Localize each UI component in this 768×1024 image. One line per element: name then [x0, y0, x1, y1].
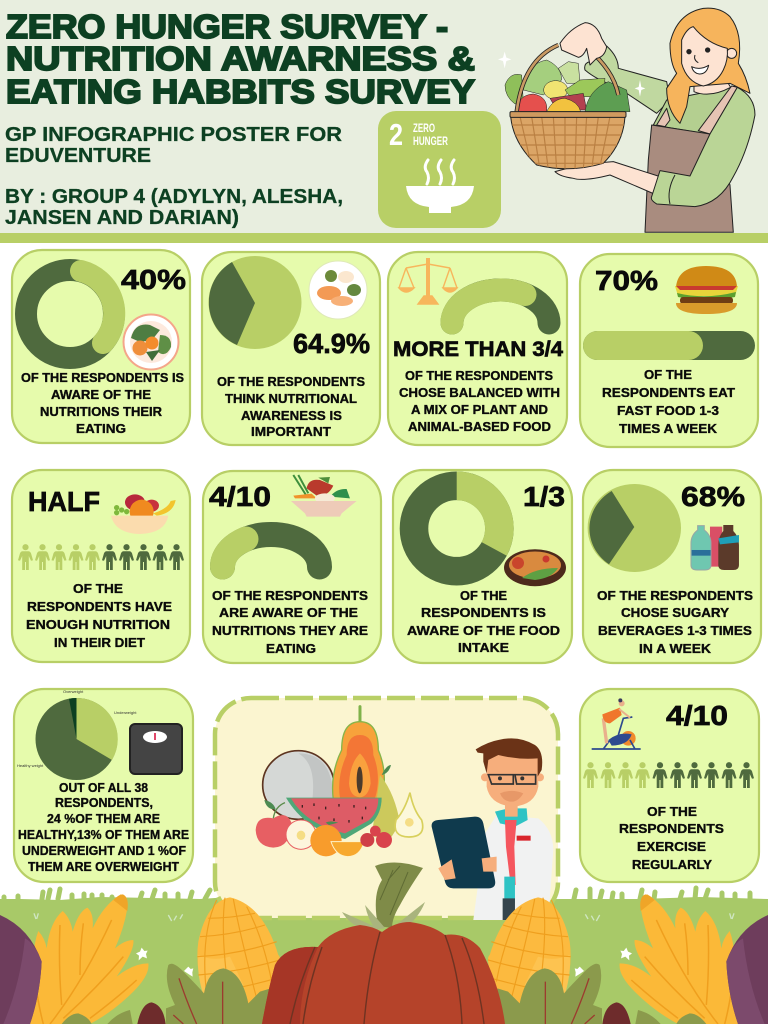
description: ANIMAL-BASED FOOD [408, 419, 551, 434]
icon: shrimp plate [309, 261, 367, 319]
description: EXERCISE [637, 839, 706, 854]
description: UNDERWEIGHT AND 1 %OF [22, 843, 186, 858]
description: CHOSE SUGARY [621, 605, 729, 620]
panel: 70% fast food [580, 254, 758, 447]
panel: weight categories [14, 689, 193, 882]
stat: 68% [681, 481, 745, 512]
description: NUTRITIONS THEIR [40, 404, 163, 419]
stat: 4/10 [666, 700, 728, 731]
panel: 4/10 aware of nutritions [203, 471, 381, 663]
description: OF THE RESPONDENTS [212, 588, 368, 603]
icon: salad plate [124, 314, 178, 370]
description: RESPONDENTS [619, 821, 724, 836]
pie chart 64.9% [208, 256, 302, 349]
description [217, 374, 365, 439]
description: IN THEIR DIET [54, 635, 145, 650]
icon: balance scales [399, 258, 457, 304]
description: OF THE [647, 804, 697, 819]
description: HEALTHY,13% OF THEM ARE [18, 827, 189, 842]
description: RESPONDENTS EAT [602, 385, 735, 400]
description [21, 370, 184, 436]
description [399, 368, 560, 434]
description [602, 367, 735, 436]
pictogram row: four of ten people [583, 762, 754, 788]
description: ARE AWARE OF THE [219, 605, 358, 620]
description: OUT OF ALL 38 [59, 780, 148, 795]
title: EATING HABBITS SURVEY [6, 73, 475, 110]
description: IMPORTANT [251, 424, 331, 439]
description: RESPONDENTS IS [421, 605, 546, 620]
gauge arc [222, 534, 320, 567]
description: TIMES A WEEK [619, 421, 718, 436]
panel: dashed illustration frame [215, 698, 558, 920]
description: OF THE [73, 581, 123, 596]
description: A MIX OF PLANT AND [411, 402, 548, 417]
pie chart: weight: Healthy weight [17, 763, 44, 768]
illustration: green leaf left [34, 913, 271, 1024]
header background [0, 0, 768, 233]
panel: half enough nutrition [12, 470, 190, 662]
description: AWARENESS IS [241, 408, 342, 423]
description: OF THE [644, 367, 692, 382]
description: OF THE RESPONDENTS [597, 588, 753, 603]
icon: soda bottles [691, 525, 739, 570]
description [26, 581, 172, 650]
authors [5, 186, 343, 229]
panel: 40% nutrition awareness [12, 250, 190, 443]
subtitle: EDUVENTURE [5, 145, 151, 167]
description: EATING [76, 421, 126, 436]
grass field [0, 888, 768, 1024]
stat: 64.9% [293, 328, 370, 359]
title: NUTRITION AWARNESS & [6, 40, 475, 77]
panel: 64.9% think awareness important [202, 252, 380, 445]
description: RESPONDENTS HAVE [27, 599, 172, 614]
illustration: green leaf right [497, 913, 734, 1024]
description: FAST FOOD 1-3 [617, 403, 719, 418]
subtitle: GP INFOGRAPHIC POSTER FOR [5, 124, 343, 146]
description [212, 588, 368, 656]
description: ENOUGH NUTRITION [26, 617, 170, 632]
illustration: corn right [488, 897, 571, 1024]
description: CHOSE BALANCED WITH [399, 385, 560, 400]
description: REGULARLY [632, 857, 712, 872]
panel: 4/10 exercise [580, 689, 759, 882]
icon: weighing scale [130, 724, 182, 774]
SDG 2 zero hunger tile: 2 [389, 117, 403, 152]
description: INTAKE [458, 640, 509, 655]
stat: 1/3 [523, 481, 565, 512]
description [407, 588, 560, 655]
description: OF THE RESPONDENTS [217, 374, 365, 389]
title [6, 8, 475, 110]
description: NUTRITIONS THEY ARE [212, 623, 368, 638]
donut chart 40% [26, 270, 114, 358]
pie chart: weight: Overweight [63, 689, 84, 694]
pie chart: weight [17, 689, 137, 780]
icon: fruit bowl [111, 494, 176, 534]
description: RESPONDENTS, [55, 795, 153, 810]
illustration: pumpkin [262, 862, 505, 1024]
panel: 68% sugary beverages [583, 470, 761, 663]
description: EATING [266, 641, 316, 656]
icon: exercise bike [592, 698, 641, 749]
icon: burger [675, 266, 738, 314]
illustration: eggplant right [726, 915, 768, 1024]
illustration: doctor with tablet [432, 738, 553, 920]
authors: BY : GROUP 4 (ADYLYN, ALESHA, [5, 186, 343, 208]
authors: JANSEN AND DARIAN) [5, 207, 239, 229]
icon: food dish [504, 549, 566, 586]
title: ZERO HUNGER SURVEY - [6, 8, 448, 45]
stat: HALF [28, 486, 100, 517]
description [619, 804, 724, 872]
description: THEM ARE OVERWEIGHT [28, 859, 179, 874]
stat: 70% [595, 265, 658, 296]
description: OF THE RESPONDENTS [405, 368, 553, 383]
subtitle [5, 124, 343, 167]
SDG 2 zero hunger tile [378, 111, 501, 228]
donut chart 1/3 [414, 486, 499, 571]
description: OF THE [460, 588, 507, 603]
illustration: woman holding basket [498, 8, 755, 232]
stat: 4/10 [209, 481, 271, 512]
description: 24 %OF THEM ARE [47, 811, 160, 826]
pictogram row: half of ten people [18, 544, 184, 570]
gauge arc [452, 290, 549, 323]
description [597, 588, 753, 656]
progress bar 70% [583, 331, 755, 360]
illustration: yellow leaf left [27, 894, 148, 1024]
illustration: yellow leaf right [620, 894, 741, 1024]
description: OF THE RESPONDENTS IS [21, 370, 184, 385]
illustration: corn left [197, 897, 280, 1024]
pie chart 68% [588, 484, 681, 572]
stat: MORE THAN 3/4 [393, 338, 563, 361]
illustration: fruits [256, 707, 423, 857]
panel: more than 3/4 balanced [388, 252, 567, 445]
SDG 2 zero hunger tile: HUNGER [413, 134, 448, 148]
description: AWARE OF THE FOOD [407, 623, 560, 638]
illustration: eggplant left [0, 915, 42, 1024]
pie chart: weight: Underweight [114, 710, 137, 715]
description: AWARE OF THE [51, 387, 151, 402]
description: IN A WEEK [639, 641, 712, 656]
SDG 2 zero hunger tile: ZERO [413, 121, 435, 135]
header divider band [0, 233, 768, 243]
description [18, 780, 189, 874]
icon: salad bowl [291, 475, 357, 517]
description: BEVERAGES 1-3 TIMES [598, 623, 752, 638]
description: THINK NUTRITIONAL [225, 391, 357, 406]
stat: 40% [121, 264, 186, 295]
panel: 1/3 aware of food intake [393, 470, 572, 663]
